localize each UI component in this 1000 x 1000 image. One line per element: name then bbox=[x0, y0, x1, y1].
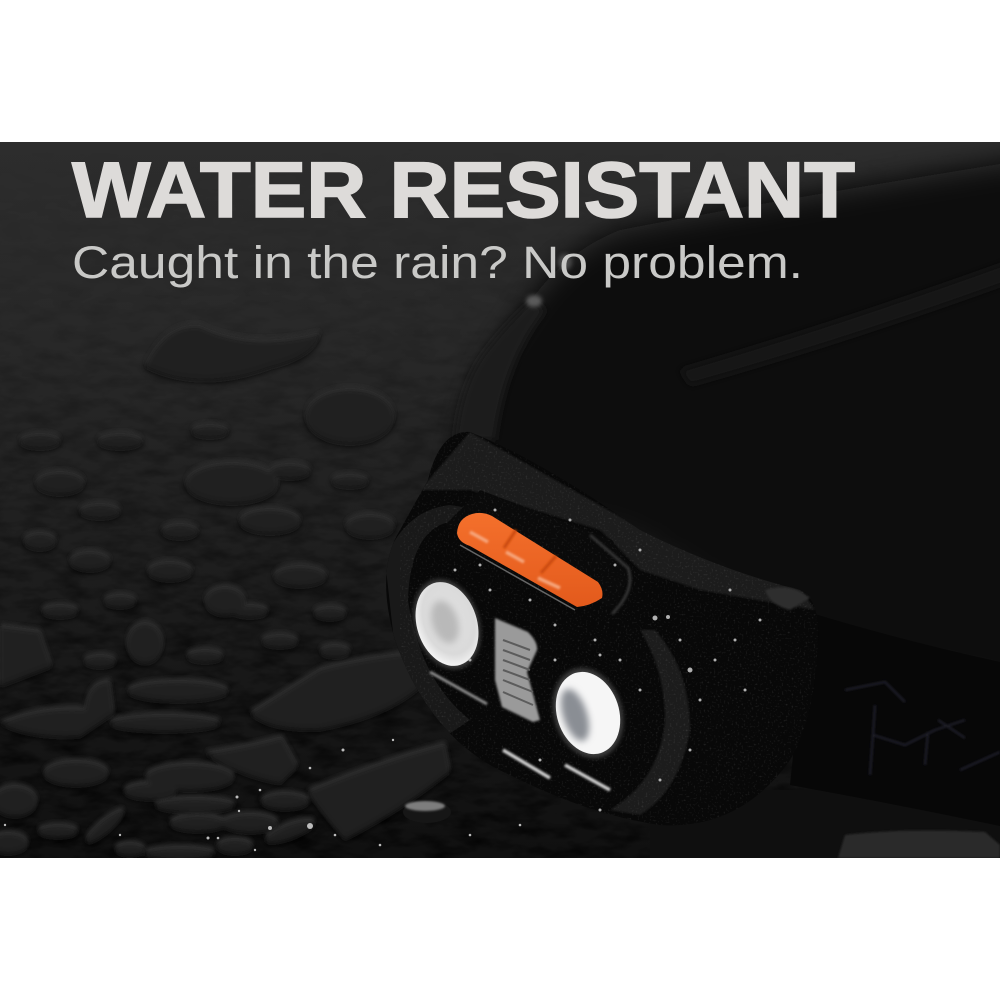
headband: right strap with pattern bbox=[790, 612, 1000, 826]
subtitle: Caught in the rain? No problem. bbox=[72, 237, 803, 288]
water droplets: bodies bbox=[0, 327, 450, 860]
sparkling droplets on ground bbox=[4, 739, 521, 851]
water droplets: lit tops bbox=[0, 323, 450, 856]
surface droplet texture bbox=[0, 419, 786, 858]
centre reflector panel bbox=[495, 618, 540, 722]
headlamp housing bbox=[385, 430, 820, 830]
droplet near lamp base bbox=[403, 801, 451, 823]
ground under right strap bbox=[664, 829, 1000, 858]
water droplets: dark undersides bbox=[22, 342, 392, 588]
right LED lens bbox=[550, 666, 626, 760]
water beads on headlamp bbox=[454, 508, 762, 812]
orange power button bbox=[457, 513, 602, 610]
housing top shoulder bbox=[385, 430, 820, 830]
title: WATER RESISTANT bbox=[72, 145, 855, 234]
photo panel: wet dark surface bbox=[0, 140, 1000, 862]
left LED lens bbox=[412, 577, 482, 671]
blurred rear of headband bbox=[450, 152, 1000, 662]
